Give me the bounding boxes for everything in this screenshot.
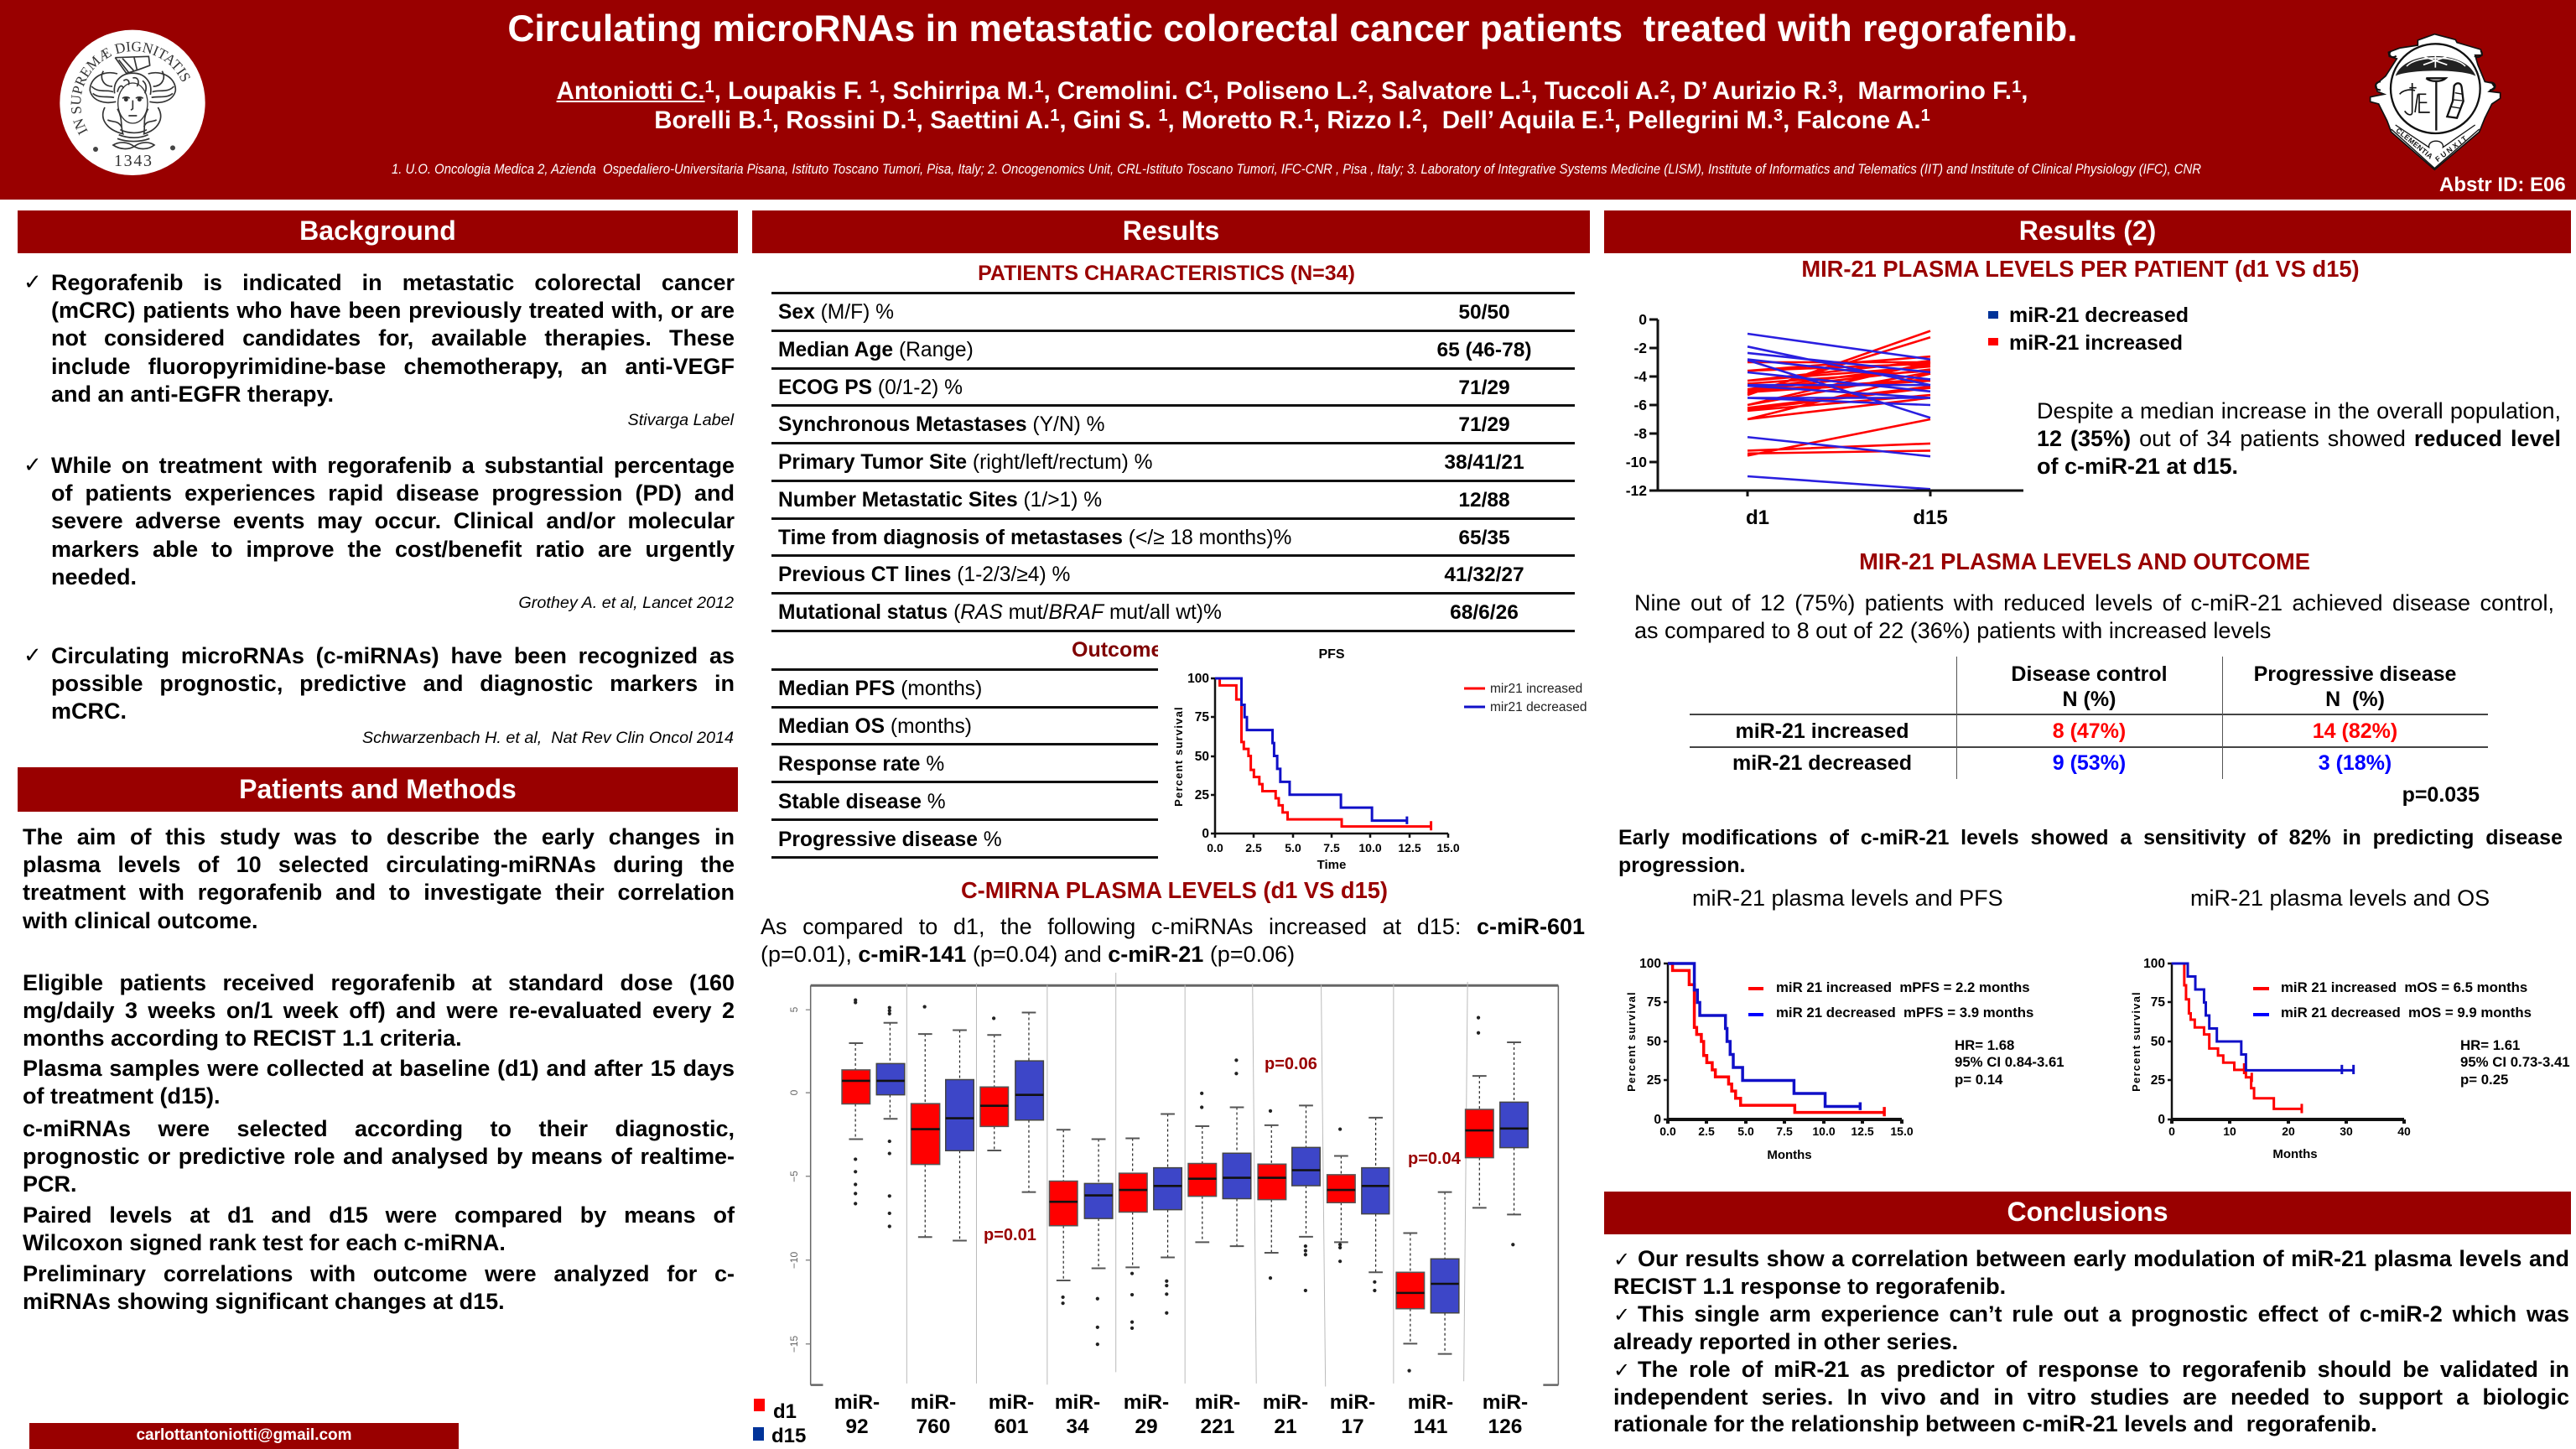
- chart: miR-21 PFS Kaplan-Meier: Percent survival: [1625, 991, 1638, 1092]
- text: median increase: of c-miR-21 at d15.: [2037, 454, 2238, 479]
- table: patient characteristics: Time from diagnosis of metastases (</≥ 18 months)%: [778, 527, 1291, 549]
- contact email bar: [29, 1423, 459, 1449]
- table: miR-21 outcome: 14 (82%): [2313, 719, 2397, 743]
- red lines: miR-21 increased: [1748, 331, 1930, 455]
- x axis labels: 760: [917, 1415, 950, 1438]
- chart: miR-21 OS Kaplan-Meier: 50: [2151, 1035, 2165, 1049]
- chart: PFS Kaplan-Meier inset: 0: [1202, 827, 1209, 841]
- text: methods: [23, 970, 735, 1314]
- text: sensitivity: [1618, 826, 2563, 877]
- legend and stats: OS: [2253, 977, 2538, 1090]
- table: patient characteristics: Synchronous Metastases (Y/N) %: [778, 413, 1105, 436]
- heading: conclusions: [1604, 1192, 2571, 1234]
- legend and stats: PFS: [1748, 977, 2038, 1090]
- authors: Antoniotti C.1, Loupakis F. 1, Schirripa M.1, Cremolini. C1, Poliseno L.2, Salvatore L.1, Tuccoli A.2, D’ Aurizio R.3, Marmorino F.1, Borelli B.1, Rossini D.1, Saettini A.1, Gini S. 1, Moretto R.1, Rizzo I.2, Dell’ Aquila E.1, Pellegrini M.3, Falcone A.1: [557, 77, 2028, 134]
- chart: miR-21 per patient lines: -6: [1633, 397, 1647, 413]
- text: methods: months according to RECIST 1.1 criteria.: [23, 1026, 462, 1051]
- blue curve: [2172, 963, 2354, 1074]
- text: circulating miRNAs: mCRC.: [51, 699, 127, 724]
- legend and stats: PFS: 95% CI 0.84-3.61: [1955, 1054, 2064, 1070]
- chart: miR-21 per patient lines: d1: [1746, 506, 1769, 529]
- text: conclusions list: RECIST 1.1 response to regorafenib.: [1613, 1274, 2006, 1299]
- legend: d1 d15: [753, 1399, 806, 1447]
- text: methods: mg/daily 3 weeks on/1 week off) and were re-evaluated every 2: [23, 998, 735, 1023]
- citation: Grothey: Grothey A. et al, Lancet 2012: [518, 594, 734, 612]
- chart: miR-21 OS Kaplan-Meier: [2122, 948, 2423, 1166]
- box pair: miR-126: [1466, 1018, 1528, 1244]
- chart: miR-21 PFS Kaplan-Meier: 50: [1647, 1035, 1661, 1049]
- chart: PFS Kaplan-Meier inset: 12.5: [1398, 841, 1421, 854]
- text: methods: c-miRNAs were selected according to their diagnostic,: [23, 1116, 735, 1141]
- x axis labels: 17: [1341, 1415, 1364, 1438]
- left wing: [90, 71, 117, 102]
- table: miR-21 outcome: N (%): [2325, 688, 2385, 711]
- panel: conclusions: [1593, 1192, 2576, 1449]
- chart: PFS Kaplan-Meier inset: Time: [1317, 858, 1346, 872]
- text: aim: treatment with regorafenib and to investigate their correlation: [23, 880, 735, 905]
- text: methods: Plasma samples were collected at baseline (d1) and after 15 days: [23, 1056, 735, 1081]
- y axis tick labels: 5: [788, 1006, 800, 1012]
- text: methods: Wilcoxon signed rank test for each c-miRNA.: [23, 1230, 506, 1255]
- table: patient characteristics: Number Metastatic Sites (1/>1) %: [778, 489, 1102, 512]
- subheading: plasma levels per patient: MIR-21 PLASMA LEVELS PER PATIENT (d1 VS d15): [1801, 256, 2360, 282]
- panel: background: ✓: [23, 453, 42, 478]
- text: median increase: 12 (35%) out of 34 patients showed reduced level: [2037, 426, 2561, 451]
- heading: patients and methods: Patients and Methods: [239, 774, 517, 804]
- icon: university of Pisa seal: IN SUPREMÆ DIGNITATIS: [70, 42, 190, 136]
- x axis labels: miR-: [1263, 1391, 1308, 1414]
- caption: OS chart: miR-21 plasma levels and OS: [2190, 886, 2490, 911]
- chart: miR-21 per patient lines: -8: [1633, 425, 1647, 442]
- x axis labels: miR-: [1483, 1391, 1528, 1414]
- text: sensitivity: progression.: [1618, 854, 1745, 877]
- table: patient characteristics: 50/50: [1458, 301, 1510, 324]
- table: outcome: Stable disease %: [778, 791, 946, 813]
- chart: PFS Kaplan-Meier inset: 5.0: [1285, 841, 1301, 854]
- box pair: miR-141: [1396, 1192, 1459, 1371]
- header banner: [0, 0, 2576, 200]
- text: regorafenib indication: include fluoropyrimidine-base chemotherapy, an anti-VEGF: [51, 354, 735, 379]
- table: miR-21 outcome: 8 (47%): [2053, 719, 2126, 743]
- y axis tick labels: −5: [788, 1171, 800, 1182]
- blue curve: [1668, 963, 1860, 1110]
- abstract id: Abstr ID: E06: [2439, 174, 2566, 196]
- text: circulating miRNAs: Circulating microRNAs (c-miRNAs) have been recognized as: [51, 643, 735, 668]
- text: comparison d1 vs d15: (p=0.01), c-miR-141 (p=0.04) and c-miR-21 (p=0.06): [761, 942, 1295, 967]
- chart: miR-21 PFS Kaplan-Meier: 0: [1654, 1113, 1661, 1127]
- chart: PFS Kaplan-Meier inset: 75: [1195, 710, 1209, 724]
- text: aim: with clinical outcome.: [23, 908, 258, 933]
- heading: background: Background: [299, 216, 456, 246]
- box pair: miR-29: [1119, 1114, 1182, 1328]
- text: regorafenib indication: (mCRC) patients who have been previously treated with, or are: [51, 298, 735, 323]
- chart: c-miRNA box plots: [753, 973, 1560, 1447]
- chart: miR-21 OS Kaplan-Meier: 20: [2282, 1124, 2295, 1138]
- red curve: [1215, 678, 1431, 830]
- chart: miR-21 PFS Kaplan-Meier: 15.0: [1890, 1124, 1914, 1138]
- p value: p=0.035: [2402, 783, 2480, 807]
- text: conclusions list: rationale for the relationship between c-miR-21 levels and regorafenib.: [1613, 1411, 2377, 1436]
- heading: results (2): Results (2): [2019, 216, 2156, 246]
- x axis labels: miR-: [911, 1391, 956, 1414]
- chart: miR-21 OS Kaplan-Meier: 100: [2143, 957, 2165, 971]
- chart: miR-21 PFS Kaplan-Meier: [1618, 948, 2038, 1166]
- legend and stats: OS: p= 0.25: [2460, 1072, 2508, 1088]
- text: circulating miRNAs: possible prognostic, predictive and diagnostic markers in: [51, 671, 735, 696]
- x axis labels: miR-: [1124, 1391, 1169, 1414]
- chart: miR-21 per patient lines: -4: [1633, 368, 1647, 385]
- x axis labels: miR-: [1330, 1391, 1375, 1414]
- chart: miR-21 per patient lines: -12: [1626, 482, 1647, 499]
- x axis labels: 92: [845, 1415, 869, 1438]
- contact email bar: carlottantoniotti@gmail.com: [136, 1426, 352, 1444]
- text: rapid progression: of patients experiences rapid disease progression (PD) and: [51, 480, 735, 506]
- icon: university of Pisa seal: 1343: [114, 152, 153, 170]
- text: rapid progression: severe adverse events may occur. Clinical and/or molecular: [51, 508, 735, 533]
- panel: background: ✓: [23, 643, 42, 668]
- chest and knot: [117, 130, 149, 142]
- table: patient characteristics: Sex (M/F) %: [778, 301, 894, 324]
- text: rapid progression: [23, 453, 735, 589]
- table: patient characteristics: Mutational status (RAS mut/BRAF mut/all wt)%: [778, 601, 1222, 624]
- heading: patients and methods: [18, 767, 738, 812]
- table: outcome: Median OS (months): [778, 715, 972, 738]
- panel: background: [18, 210, 738, 747]
- x axis labels: miR-: [1408, 1391, 1453, 1414]
- text: circulating miRNAs: [23, 643, 735, 724]
- lower wings: [103, 107, 161, 134]
- table: miR-21 outcome: miR-21 decreased: [1732, 751, 1912, 775]
- box pair: miR-221: [1188, 1060, 1251, 1246]
- x axis labels: miR-: [1195, 1391, 1240, 1414]
- table: patient characteristics: 41/32/27: [1444, 564, 1524, 586]
- dome: [2396, 56, 2475, 76]
- chart: PFS Kaplan-Meier inset: mir21 increased: [1490, 682, 1582, 696]
- chart: miR-21 PFS Kaplan-Meier: 7.5: [1776, 1124, 1793, 1138]
- chart: miR-21 PFS Kaplan-Meier: 12.5: [1851, 1124, 1874, 1138]
- subheading: c-miRNA plasma levels: C-MIRNA PLASMA LEVELS (d1 VS d15): [961, 877, 1388, 903]
- citation: Schwarzenbach: Schwarzenbach H. et al, Nat Rev Clin Oncol 2014: [362, 729, 734, 747]
- chart: miR-21 per patient lines: [1614, 306, 2033, 532]
- table: patient characteristics: 38/41/21: [1444, 451, 1524, 474]
- x axis labels: 34: [1066, 1415, 1089, 1438]
- heading: conclusions: Conclusions: [2007, 1197, 2168, 1227]
- text: median increase: Despite a median increase in the overall population,: [2037, 398, 2561, 423]
- text: conclusions list: already reported in other series.: [1613, 1329, 1958, 1354]
- chart: PFS Kaplan-Meier inset: 25: [1195, 788, 1209, 802]
- table: miR-21 outcome: 3 (18%): [2319, 751, 2392, 775]
- table: miR-21 outcome: N (%): [2063, 688, 2116, 711]
- text: methods: Eligible patients received regorafenib at standard dose (160: [23, 970, 735, 995]
- heading: results: [752, 210, 1590, 253]
- text: nine out of twelve: [1634, 590, 2554, 643]
- affiliations: 1. U.O. Oncologia Medica 2, Azienda Ospedaliero-Universitaria Pisana, Istituto Toscano Tumori, Pisa, Italy; 2. Oncogenomics Unit, CRL-Istituto Toscano Tumori, IFC-CNR , Pisa , Italy; 3. Laboratory of Integrative Systems Medicine (LISM), Institute of Informatics and Telematics (IIT) and Institute of Clinical Physiology (IFC), CNR: [392, 162, 2201, 177]
- x axis labels: [834, 1391, 1528, 1438]
- legend and stats: OS: miR 21 decreased mOS = 9.9 months: [2281, 1005, 2532, 1021]
- chart: PFS Kaplan-Meier inset: 2.5: [1245, 841, 1262, 854]
- text: methods: of treatment (d15).: [23, 1083, 221, 1109]
- table: patient characteristics: 71/29: [1458, 377, 1510, 399]
- chart: miR-21 PFS Kaplan-Meier: 25: [1647, 1073, 1661, 1088]
- T-symbol: [2426, 78, 2446, 131]
- blue curve: [1215, 678, 1407, 824]
- chart: miR-21 PFS Kaplan-Meier: Months: [1767, 1148, 1812, 1162]
- red curve: [2172, 963, 2302, 1114]
- panel: results 2: [1604, 210, 2571, 911]
- x axis labels: miR-: [1055, 1391, 1100, 1414]
- table: miR-21 outcome: miR-21 increased: [1735, 719, 1909, 743]
- text: aim: plasma levels of 10 selected circulating-miRNAs during the: [23, 852, 735, 877]
- axes: [1649, 319, 2023, 496]
- chart: PFS Kaplan-Meier inset: Percent survival: [1172, 706, 1185, 807]
- text: conclusions list: independent series. In vivo and in vitro studies are needed to support a biologic: [1613, 1384, 2569, 1410]
- legend: miR-21 direction: miR-21 decreased: [2009, 304, 2189, 327]
- subheading: patients characteristics: PATIENTS CHARACTERISTICS (N=34): [978, 262, 1355, 285]
- text: conclusions list: ✓: [1613, 1303, 1630, 1327]
- title: Circulating microRNAs in metastatic colorectal cancer patients treated with regorafenib.: [507, 8, 2078, 49]
- caption: PFS chart: miR-21 plasma levels and PFS: [1692, 886, 2003, 911]
- legend and stats: OS: HR= 1.61: [2460, 1037, 2520, 1053]
- text: median increase: [2037, 398, 2561, 479]
- table: patient characteristics: [771, 292, 1575, 632]
- table: miR-21 outcome: Progressive disease: [2254, 662, 2456, 686]
- text: rapid progression: While on treatment with regorafenib a substantial percentage: [51, 453, 735, 478]
- chart: miR-21 OS Kaplan-Meier: 25: [2151, 1073, 2165, 1088]
- table: patient characteristics: 12/88: [1458, 489, 1510, 512]
- y axis tick labels: −10: [788, 1251, 800, 1269]
- monogram: [2400, 83, 2430, 115]
- chart: miR-21 OS Kaplan-Meier: Percent survival: [2130, 991, 2142, 1092]
- legend and stats: PFS: p= 0.14: [1955, 1072, 2002, 1088]
- table: patient characteristics: 71/29: [1458, 413, 1510, 436]
- panel: results: [752, 210, 1590, 967]
- chart: PFS Kaplan-Meier inset: 10.0: [1358, 841, 1382, 854]
- text: regorafenib indication: Regorafenib is indicated in metastatic colorectal cancer: [51, 270, 735, 295]
- chart: PFS Kaplan-Meier inset: 50: [1195, 750, 1209, 764]
- box pair: miR-17: [1327, 1118, 1389, 1291]
- chart: miR-21 OS Kaplan-Meier: 0: [2158, 1113, 2165, 1127]
- table: miR-21 outcome: Disease control: [2011, 662, 2168, 686]
- chart: PFS Kaplan-Meier inset: mir21 decreased: [1490, 700, 1587, 714]
- chart: miR-21 OS Kaplan-Meier: 75: [2151, 995, 2165, 1010]
- box pair: miR-760: [911, 1007, 974, 1241]
- legend: miR-21 direction: [1988, 304, 2189, 355]
- legend and stats: PFS: HR= 1.68: [1955, 1037, 2014, 1053]
- heading: results (2): [1604, 210, 2571, 253]
- text: sensitivity: Early modifications of c-miR-21 levels showed a sensitivity of 82% in predicting disease: [1618, 826, 2563, 849]
- table: patient characteristics: ECOG PS (0/1-2) %: [778, 377, 963, 399]
- chart: miR-21 per patient lines: 0: [1639, 311, 1647, 328]
- red curve: [1668, 963, 1884, 1116]
- x axis labels: 21: [1274, 1415, 1297, 1438]
- chart: miR-21 per patient lines: d15: [1913, 506, 1948, 529]
- text: comparison d1 vs d15: As compared to d1, the following c-miRNAs increased at d15: c-miR-601: [761, 914, 1585, 939]
- chart: miR-21 per patient lines: -10: [1626, 454, 1647, 470]
- x axis labels: miR-: [834, 1391, 880, 1414]
- text: aim: The aim of this study was to describe the early changes in: [23, 824, 735, 849]
- text: regorafenib indication: not considered candidates for, available therapies. These: [51, 325, 735, 351]
- text: methods: PCR.: [23, 1171, 77, 1197]
- p-value annotations: p=0.01: [984, 1226, 1036, 1244]
- icon: hospital crest: [2370, 34, 2501, 171]
- chart: miR-21 per patient lines: -2: [1633, 340, 1647, 356]
- chart: PFS Kaplan-Meier inset: 100: [1187, 672, 1209, 686]
- p-value annotations: p=0.04: [1408, 1150, 1462, 1168]
- chart: miR-21 OS Kaplan-Meier: 40: [2397, 1124, 2411, 1138]
- heading: background: [18, 210, 738, 253]
- chart: PFS Kaplan-Meier inset: PFS: [1318, 647, 1345, 662]
- x axis labels: 29: [1135, 1415, 1158, 1438]
- panel: patients and methods: [18, 767, 738, 1449]
- table: patient characteristics: Primary Tumor Site (right/left/rectum) %: [778, 451, 1152, 474]
- text: conclusions list: ✓: [1613, 1358, 1630, 1382]
- heading: results: Results: [1123, 216, 1219, 246]
- chart: miR-21 OS Kaplan-Meier: 0: [2168, 1124, 2175, 1138]
- panel: background: ✓: [23, 270, 42, 295]
- x axis labels: 126: [1488, 1415, 1522, 1438]
- headdress: [115, 56, 150, 73]
- text: methods: Preliminary correlations with outcome were analyzed for c-: [23, 1261, 735, 1286]
- table: patient characteristics: Previous CT lines (1-2/3/≥4) %: [778, 564, 1070, 586]
- legend and stats: OS: miR 21 increased mOS = 6.5 months: [2281, 979, 2527, 995]
- table: patient characteristics: Median Age (Range): [778, 339, 974, 361]
- icon: hospital crest: FUNXIT: [2435, 136, 2466, 162]
- text: aim: [22, 824, 735, 933]
- icon: university of Pisa seal: [60, 30, 205, 175]
- icon: hospital crest: CLEMENTIA: [2397, 128, 2432, 159]
- box pair: miR-92: [842, 1000, 905, 1227]
- text: conclusions list: Our results show a correlation between early modulation of miR-21 plasma levels and: [1638, 1246, 2569, 1271]
- chart: miR-21 OS Kaplan-Meier: 10: [2223, 1124, 2236, 1138]
- table: outcome: Median PFS (months): [778, 678, 982, 700]
- chart: PFS Kaplan-Meier inset: 7.5: [1323, 841, 1340, 854]
- legend and stats: PFS: miR 21 increased mPFS = 2.2 months: [1776, 979, 2030, 995]
- right wing: [148, 71, 175, 102]
- table: miR-21 outcome: [1690, 657, 2488, 779]
- box pair: miR-34: [1049, 1130, 1113, 1344]
- box pair: miR-21: [1258, 1105, 1320, 1291]
- face and hair: [118, 83, 148, 123]
- chart: miR-21 OS Kaplan-Meier: Months: [2272, 1147, 2318, 1161]
- text: regorafenib indication: and an anti-EGFR therapy.: [51, 382, 334, 407]
- y axis tick labels: 0: [788, 1089, 800, 1095]
- table: outcome: Progressive disease %: [778, 828, 1002, 851]
- text: nine out of twelve: as compared to 8 out of 22 (36%) patients with increased levels: [1634, 618, 2271, 643]
- y axis tick labels: −15: [788, 1335, 800, 1353]
- y axis tick labels: [788, 1006, 800, 1353]
- table: outcome: Response rate %: [778, 753, 944, 776]
- text: conclusions list: The role of miR-21 as predictor of response to regorafenib should be validated in: [1638, 1357, 2569, 1382]
- text: conclusions list: [1613, 1245, 2569, 1438]
- legend and stats: OS: 95% CI 0.73-3.41: [2460, 1054, 2570, 1070]
- text: rapid progression: markers able to improve the cost/benefit ratio are urgently: [51, 537, 735, 562]
- text: regorafenib indication: [23, 270, 735, 407]
- chart: miR-21 PFS Kaplan-Meier: 100: [1639, 957, 1661, 971]
- legend: d1 d15: d1: [773, 1400, 797, 1423]
- table: patient characteristics: 65/35: [1458, 527, 1510, 549]
- citation: Stivarga: Stivarga Label: [628, 411, 734, 429]
- p-value annotations: [984, 1055, 1462, 1244]
- text: nine out of twelve: Nine out of 12 (75%) patients with reduced levels of c-miR-21 achieved disease control,: [1634, 590, 2554, 615]
- table: miR-21 outcome: 9 (53%): [2053, 751, 2126, 775]
- chart: miR-21 OS Kaplan-Meier: 30: [2340, 1124, 2353, 1138]
- x axis labels: 601: [995, 1415, 1028, 1438]
- table: patient characteristics: 65 (46-78): [1436, 339, 1532, 361]
- x axis labels: 221: [1201, 1415, 1234, 1438]
- text: comparison d1 vs d15: [761, 914, 1585, 967]
- text: conclusions list: This single arm experience can’t rule out a prognostic effect of c-miR-2 which was: [1638, 1301, 2569, 1327]
- box pair: miR-601: [980, 1012, 1043, 1192]
- legend: miR-21 direction: miR-21 increased: [2009, 331, 2183, 355]
- text: methods: Paired levels at d1 and d15 were compared by means of: [23, 1202, 735, 1228]
- chart: PFS Kaplan-Meier inset: [1172, 647, 1587, 872]
- chart: miR-21 PFS Kaplan-Meier: 0.0: [1659, 1124, 1676, 1138]
- x axis labels: 141: [1414, 1415, 1447, 1438]
- chart: miR-21 PFS Kaplan-Meier: 5.0: [1737, 1124, 1754, 1138]
- p-value annotations: p=0.06: [1265, 1055, 1317, 1073]
- text: methods: prognostic or predictive role and analysed by means of realtime-: [23, 1144, 735, 1169]
- table: patient characteristics: 68/6/26: [1450, 601, 1519, 624]
- table: outcome: [771, 638, 1158, 859]
- chart: PFS Kaplan-Meier inset: 15.0: [1436, 841, 1460, 854]
- figure: [2447, 83, 2464, 118]
- chart: miR-21 PFS Kaplan-Meier: 10.0: [1812, 1124, 1836, 1138]
- chart: miR-21 PFS Kaplan-Meier: 75: [1647, 995, 1661, 1010]
- text: methods: miRNAs showing significant changes at d15.: [23, 1289, 505, 1314]
- text: conclusions list: ✓: [1613, 1248, 1630, 1271]
- plot frame: [806, 973, 1558, 1386]
- x axis labels: miR-: [989, 1391, 1034, 1414]
- blue lines: miR-21 decreased: [1748, 334, 1930, 489]
- chart: PFS Kaplan-Meier inset: 0.0: [1207, 841, 1223, 854]
- legend: d1 d15: d15: [771, 1425, 806, 1447]
- chart: miR-21 PFS Kaplan-Meier: 2.5: [1698, 1124, 1715, 1138]
- subheading: plasma levels and outcome: MIR-21 PLASMA LEVELS AND OUTCOME: [1859, 548, 2310, 574]
- legend and stats: PFS: miR 21 decreased mPFS = 3.9 months: [1776, 1005, 2033, 1021]
- text: rapid progression: needed.: [51, 564, 137, 589]
